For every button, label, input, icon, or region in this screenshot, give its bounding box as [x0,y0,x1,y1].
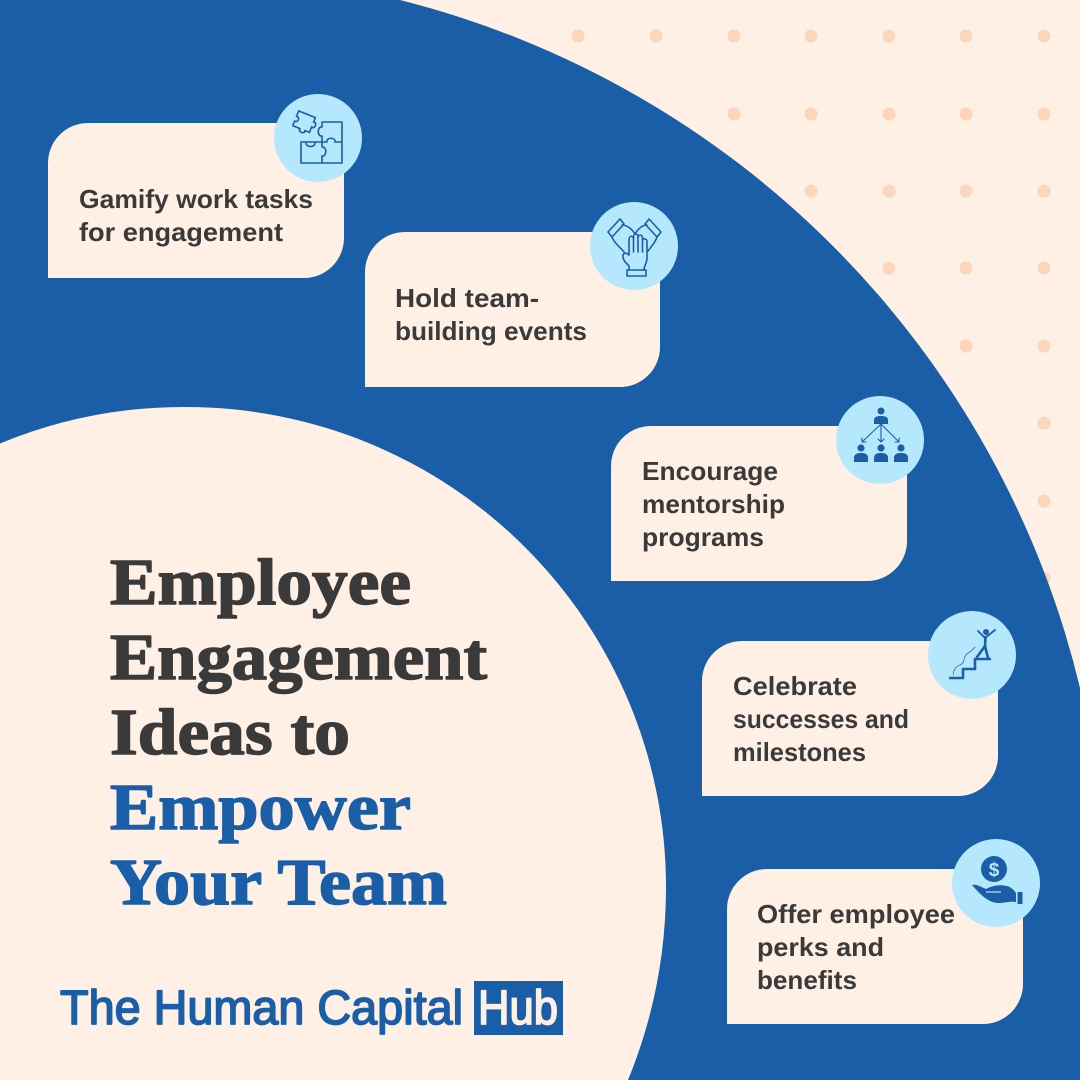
panel: gamify [48,94,362,278]
icon: climbing stairs [928,611,1016,699]
text: perks: benefits [757,965,857,995]
text: perks: perks and [757,932,884,962]
icon: hand holding coin: $ [989,860,1000,881]
text: team building: Hold team- [395,283,539,313]
panel: mentorship [611,396,924,581]
text: mentorship: programs [642,522,764,552]
text: celebrate: Celebrate [733,671,857,701]
panel: celebrate [702,611,1016,796]
text: celebrate: milestones [733,737,866,767]
icon: puzzle [274,94,362,182]
title: Your Team [110,846,447,919]
text: gamify: for engagement [79,217,283,247]
text: perks: Offer employee [757,899,955,929]
title: Employee [110,546,411,619]
logo: The Human Capital Hub: The Human Capital [60,981,463,1035]
icon: stacked hands [590,202,678,290]
icon: mentoring hierarchy [836,396,924,484]
title: Ideas to [110,696,350,769]
text: team building: building events [395,316,587,346]
title [110,546,487,919]
panel: team building [365,202,678,387]
text: mentorship: mentorship [642,489,785,519]
title: Engagement [110,621,487,694]
cream inner circle panel [0,407,666,1080]
logo: The Human Capital Hub: Hub [478,981,558,1035]
panel: perks [727,839,1040,1024]
icon: hand holding coin [952,839,1040,927]
text: celebrate: successes and [733,704,909,734]
title: Empower [110,771,411,844]
text: gamify: Gamify work tasks [79,184,313,214]
text: mentorship: Encourage [642,456,778,486]
